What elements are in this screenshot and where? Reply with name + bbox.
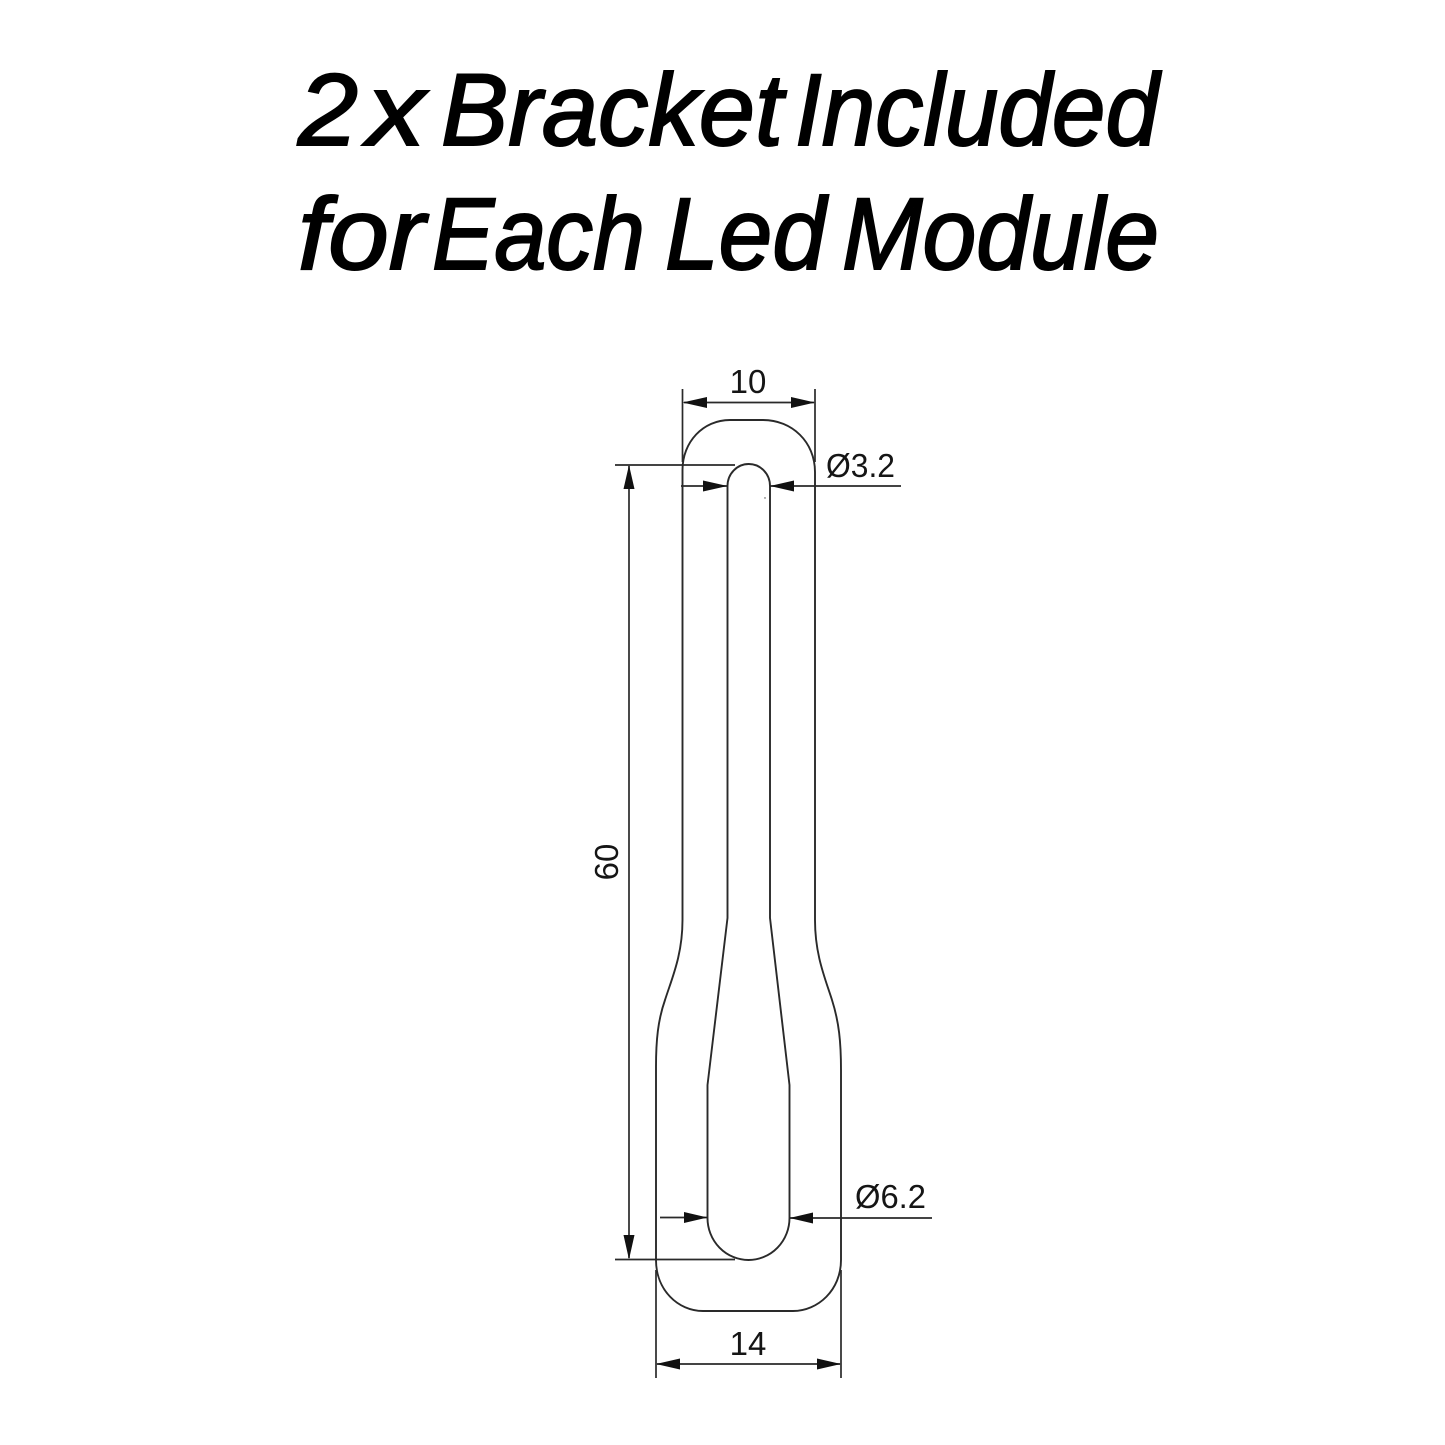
bracket inner slot: [708, 464, 790, 1260]
title: for: [298, 177, 429, 291]
title: [297, 53, 1162, 291]
title: Each: [432, 177, 645, 291]
dimension: width 10: 10: [730, 363, 766, 400]
title: Led: [665, 177, 829, 291]
dimension: hole diameter 6.2: Ø6.2: [855, 1178, 926, 1215]
dimension: hole diameter 6.2: [660, 1178, 932, 1224]
title: Module: [842, 177, 1159, 291]
dimension: length 60: 60: [588, 844, 625, 880]
dimension: hole diameter 3.2: Ø3.2: [826, 447, 895, 484]
title: Bracket: [441, 53, 787, 167]
title: 2: [297, 53, 358, 167]
dimension: width 14: [656, 1270, 841, 1378]
dimension: width 10: [682, 363, 815, 462]
dimension: hole diameter 3.2: [681, 447, 901, 499]
bracket outer outline: [656, 420, 841, 1311]
technical drawing: bracket: [588, 363, 932, 1378]
title: x: [361, 53, 428, 167]
title: Included: [795, 53, 1162, 167]
dimension: length 60: [588, 465, 735, 1260]
dimension: width 14: 14: [730, 1325, 766, 1362]
